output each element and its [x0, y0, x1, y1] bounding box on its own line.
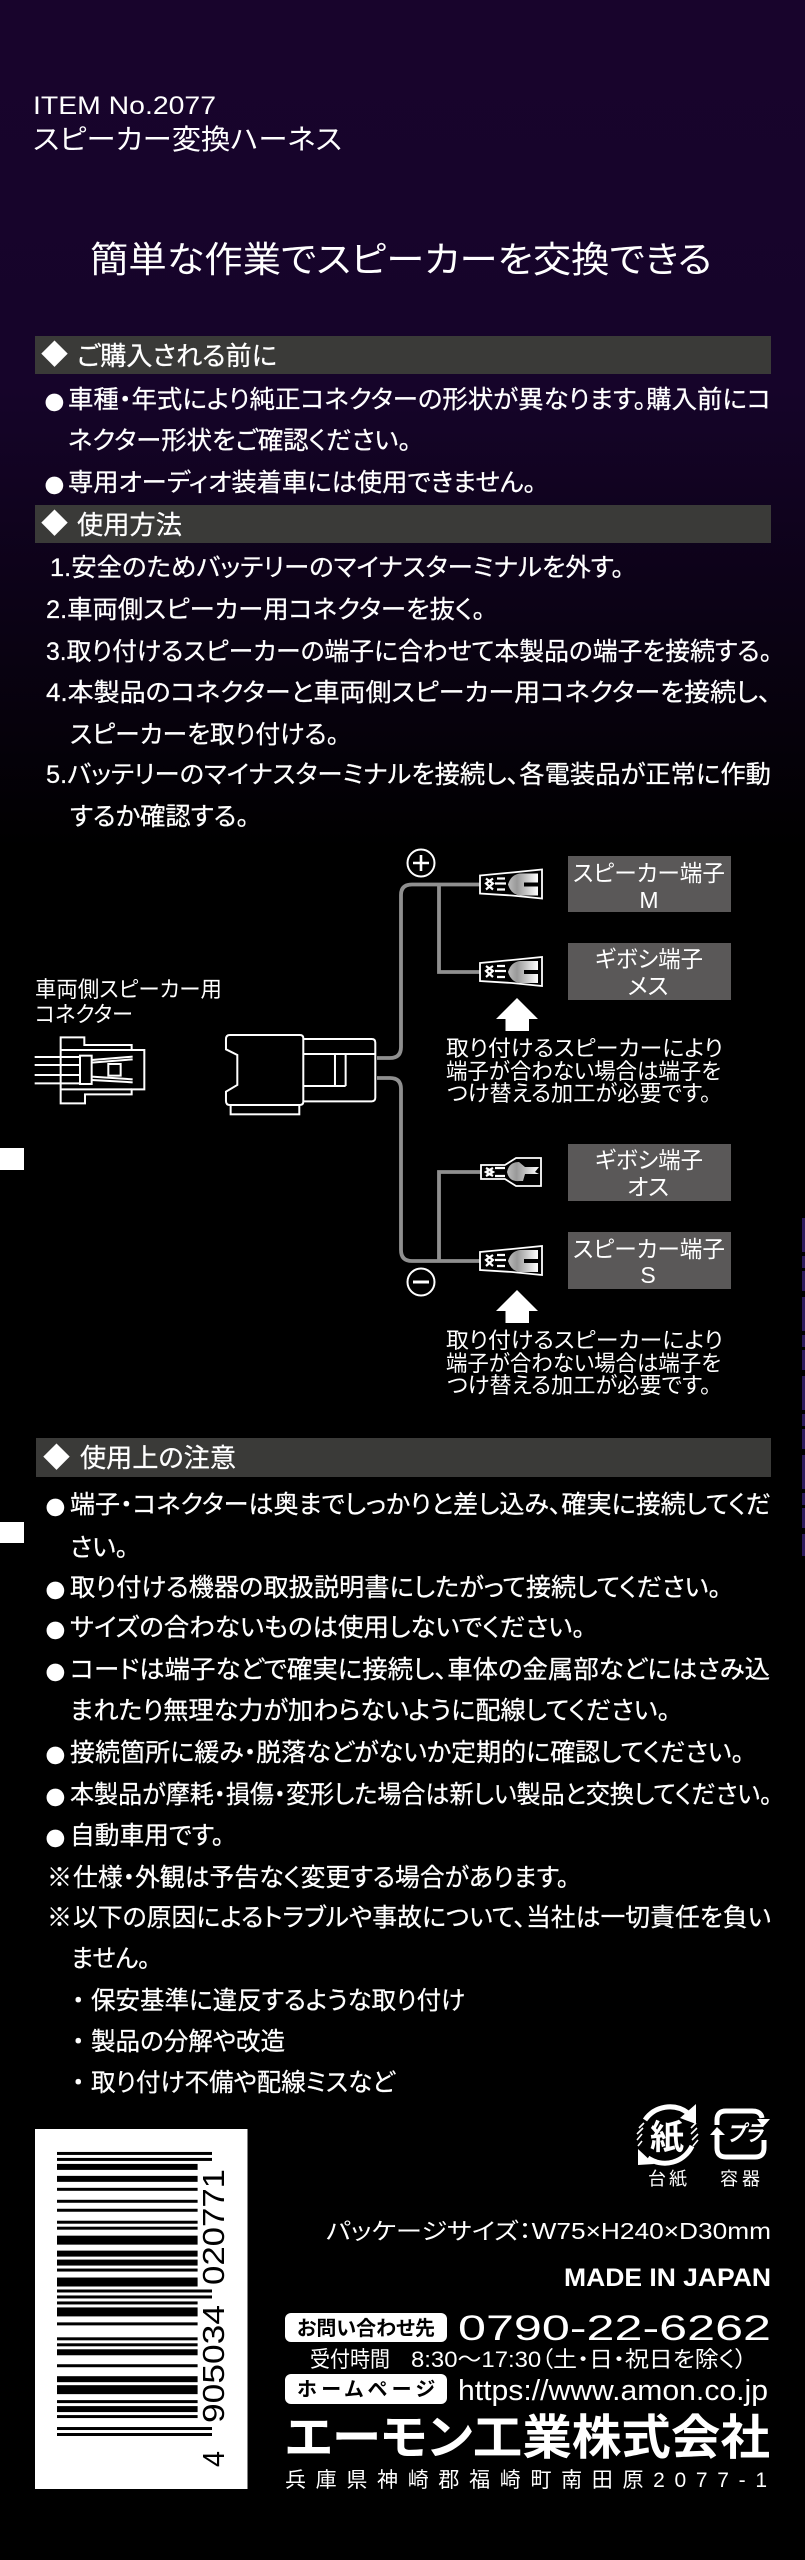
section header: before purchase — [35, 336, 771, 374]
label: vehicle side connector: 車両側スピーカー用 — [35, 977, 222, 1002]
text block: precautions: 以下の原因によるトラブルや事故について、当社は一切責任を負い — [73, 1904, 771, 1932]
text block: before purchase notes: ネクター形状をご確認ください。 — [68, 427, 411, 455]
text block: precautions: 取り付ける機器の取扱説明書にしたがって接続してください。 — [70, 1574, 721, 1602]
label: vehicle side connector — [35, 977, 222, 1027]
barcode: 020771 — [196, 2169, 231, 2285]
text block: precautions: ・ — [72, 2028, 85, 2056]
text block: precautions: 保安基準に違反するような取り付け — [91, 1987, 465, 2015]
text block: usage steps: するか確認する。 — [70, 803, 249, 831]
contact block — [285, 2309, 771, 2407]
label: gibo terminal female: ギボシ端子 — [595, 946, 703, 972]
label: speaker terminal S — [568, 1232, 731, 1289]
phone number: 0790-22-6262 — [458, 2309, 771, 2348]
text block: before purchase notes: 専用オーディオ装着車には使用できません。 — [68, 469, 536, 497]
contact label pill: お問い合わせ先 — [297, 2317, 435, 2340]
label: recycling materials: 容器 — [720, 2169, 760, 2189]
text block: precautions: 端子・コネクターは奥までしっかりと差し込み、確実に接続してくだ — [70, 1491, 771, 1519]
text block: precautions: コードは端子などで確実に接続し、車体の金属部などにはさみ込 — [70, 1656, 770, 1684]
text block: precautions: ※ — [47, 1864, 72, 1892]
item number and product name: ITEM No.2077 — [33, 92, 216, 120]
section header: how to use — [35, 505, 771, 543]
icon: harness connector — [226, 1035, 375, 1114]
homepage label pill — [285, 2374, 447, 2404]
text block: usage steps: 3.取り付けるスピーカーの端子に合わせて本製品の端子を接続する。 — [46, 638, 772, 666]
text block: precautions — [43, 1482, 772, 2097]
text block: precautions: サイズの合わないものは使用しないでください。 — [70, 1614, 585, 1642]
text block: precautions: ・ — [72, 1987, 85, 2015]
text block: precautions: 接続箇所に緩み・脱落などがないか定期的に確認してください。 — [70, 1739, 744, 1767]
text block: precautions: 自動車用です。 — [70, 1822, 224, 1850]
barcode: 905034 — [196, 2305, 231, 2423]
section header: precautions — [36, 1438, 771, 1477]
icon: paper recycling mark — [637, 2104, 698, 2165]
label: speaker terminal M: M — [639, 887, 659, 913]
text block: precautions: ・ — [72, 2069, 85, 2097]
label: gibo terminal male: ギボシ端子 — [595, 1147, 703, 1173]
icon: speaker terminal M — [480, 870, 542, 898]
label: speaker terminal M: スピーカー端子 — [573, 860, 725, 886]
text block: usage steps — [46, 554, 772, 831]
section header: before purchase: ◆ — [41, 340, 68, 370]
text block: precautions: ● — [43, 1772, 68, 1818]
icon: paper recycling mark: 紙 — [650, 2119, 684, 2157]
text block: usage steps: 4.本製品のコネクターと車両側スピーカー用コネクターを接続し、 — [46, 679, 771, 707]
section header: precautions: 使用上の注意 — [80, 1443, 236, 1473]
label: speaker terminal S: スピーカー端子 — [573, 1236, 725, 1262]
callout: upper terminal note: 端子が合わない場合は端子を — [446, 1059, 721, 1084]
callout: upper terminal note: つけ替える加工が必要です。 — [447, 1081, 711, 1106]
barcode — [35, 2129, 248, 2489]
text block: precautions: ● — [43, 1813, 68, 1859]
text block: before purchase notes: ● — [42, 460, 67, 506]
text block: precautions: ● — [43, 1647, 68, 1693]
label: gibo terminal male: オス — [627, 1174, 669, 1200]
callout: upper terminal note: 取り付けるスピーカーにより — [446, 1036, 723, 1061]
wires — [377, 884, 481, 1261]
company address: 兵庫県神崎郡福崎町南田原2077-1 — [285, 2469, 767, 2492]
business hours: 8:30〜17:30（土・日・祝日を除く） — [411, 2347, 747, 2372]
icon: gibo terminal male — [481, 1158, 541, 1186]
text block: precautions: ● — [43, 1730, 68, 1776]
section header: how to use: 使用方法 — [77, 510, 182, 540]
callout: lower terminal note: 端子が合わない場合は端子を — [446, 1351, 721, 1376]
text block: before purchase notes: 車種・年式により純正コネクターの形状が異なります。購入前にコ — [68, 386, 771, 414]
text block: precautions: ● — [43, 1605, 68, 1651]
label: vehicle side connector: コネクター — [35, 1002, 133, 1027]
arrow: lower up arrow — [496, 1290, 538, 1323]
label: recycling materials — [648, 2169, 760, 2189]
text block: precautions: 製品の分解や改造 — [91, 2028, 285, 2056]
text block: precautions: 取り付け不備や配線ミスなど — [91, 2069, 396, 2097]
icon: vehicle side connector — [35, 1037, 144, 1103]
label: speaker terminal M — [568, 856, 731, 913]
label: gibo terminal male — [568, 1144, 731, 1201]
callout: lower terminal note: 取り付けるスピーカーにより — [446, 1328, 723, 1353]
contact label pill — [285, 2313, 447, 2342]
text block: precautions: ● — [43, 1565, 68, 1611]
item number and product name: スピーカー変換ハーネス — [33, 124, 342, 155]
business hours: 受付時間 — [310, 2347, 390, 2372]
text block: usage steps: 2.車両側スピーカー用コネクターを抜く。 — [46, 596, 485, 624]
text block: precautions: さい。 — [70, 1534, 128, 1562]
text block: precautions: ※ — [47, 1904, 72, 1932]
label: gibo terminal female: メス — [628, 973, 668, 999]
title: 簡単な作業でスピーカーを交換できる — [90, 239, 712, 280]
text block: usage steps: スピーカーを取り付ける。 — [70, 721, 339, 749]
label: recycling materials: 台紙 — [648, 2169, 687, 2189]
website address: https://www.amon.co.jp — [458, 2375, 768, 2407]
callout: upper terminal note — [446, 1036, 723, 1106]
label: gibo terminal female — [568, 943, 731, 1000]
text block: before purchase notes — [42, 377, 771, 506]
text block: precautions: まれたり無理な力が加わらないように配線してください。 — [70, 1697, 670, 1725]
text block: precautions: ● — [43, 1482, 68, 1528]
text block: usage steps: 1.安全のためバッテリーのマイナスターミナルを外す。 — [50, 554, 624, 582]
item number and product name — [33, 92, 342, 155]
arrow: upper up arrow — [496, 998, 538, 1031]
section header: before purchase: ご購入される前に — [77, 341, 277, 371]
section header: precautions: ◆ — [43, 1443, 70, 1473]
callout: lower terminal note: つけ替える加工が必要です。 — [447, 1373, 711, 1398]
company name: エーモン工業株式会社 — [285, 2412, 770, 2465]
icon: speaker terminal S — [480, 1246, 542, 1275]
package size: パッケージサイズ：W75×H240×D30mm — [326, 2218, 771, 2244]
icon: plus polarity — [408, 850, 434, 876]
icon: minus polarity — [408, 1268, 434, 1296]
homepage label pill: ホームページ — [297, 2379, 435, 2401]
icon: plastic recycling mark — [710, 2111, 770, 2157]
text block: precautions: 仕様・外観は予告なく変更する場合があります。 — [73, 1864, 569, 1892]
made in japan: MADE IN JAPAN — [564, 2264, 771, 2292]
wiring diagram — [35, 850, 731, 1398]
text block: precautions: ません。 — [71, 1945, 150, 1973]
callout: lower terminal note — [446, 1328, 723, 1398]
barcode: 4 — [196, 2451, 231, 2467]
icon: gibo terminal female — [480, 957, 542, 986]
section header: how to use: ◆ — [41, 509, 68, 539]
label: speaker terminal S: S — [640, 1262, 656, 1288]
text block: usage steps: 5.バッテリーのマイナスターミナルを接続し、各電装品が正常に作動 — [46, 761, 771, 789]
text block: precautions: 本製品が摩耗・損傷・変形した場合は新しい製品と交換してください。 — [70, 1781, 772, 1809]
text block: before purchase notes: ● — [42, 377, 67, 423]
icon: plastic recycling mark: プラ — [727, 2121, 764, 2146]
